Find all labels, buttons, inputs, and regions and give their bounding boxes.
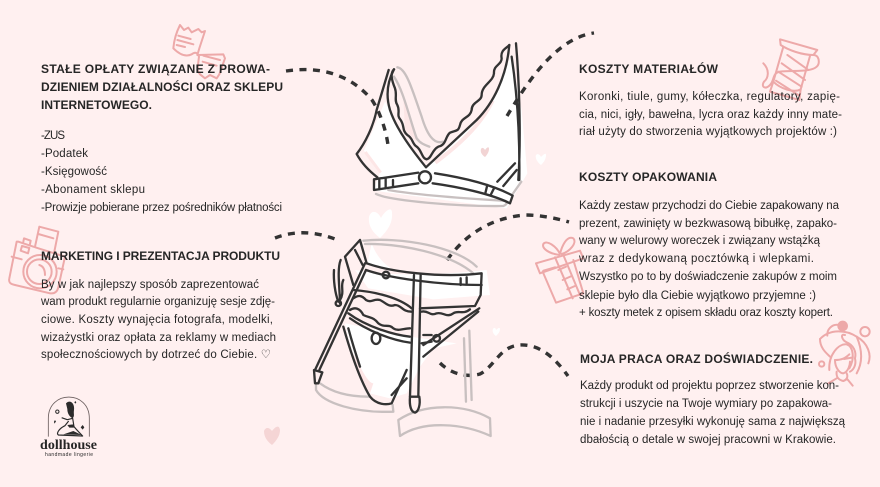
paragraph: material costs: Koronki, tiule, gumy, kółeczka, regulatory, zapię- [579, 91, 840, 103]
paragraph: marketing: społecznościowych by dotrzeć do Ciebie. ♡ [41, 349, 271, 361]
paragraph: marketing: ciowe. Koszty wynajęcia fotografa, modelki, [41, 314, 273, 326]
logo arch and figure [48, 397, 89, 437]
logo: dollhouse [40, 397, 97, 458]
paragraph: own work [580, 380, 846, 446]
list: fixed cost items: -ZUS [41, 130, 65, 142]
list: fixed cost items: -Prowizje pobierane przez pośredników płatności [41, 202, 282, 214]
heading: material costs: KOSZTY MATERIAŁÓW [579, 61, 719, 76]
icon: receipt [173, 25, 225, 78]
paragraph: packaging costs: Każdy zestaw przychodzi do Ciebie zapakowany na [579, 200, 840, 212]
icon: camera [9, 227, 65, 293]
list: fixed cost items: -Podatek [41, 148, 88, 160]
list: fixed cost items [41, 130, 282, 214]
heading: fixed costs: STAŁE OPŁATY ZWIĄZANE Z PROWA- [41, 62, 270, 76]
heading: fixed costs: INTERNETOWEGO. [41, 98, 152, 112]
icon: heart small pink [481, 147, 489, 157]
paragraph: packaging costs [578, 200, 840, 319]
paragraph: packaging costs: wany w welurowy woreczek i związany wstążką [578, 235, 821, 247]
paragraph: packaging costs: sklepie było dla Ciebie wyjątkowo przyjemne :) [579, 290, 816, 302]
heading: fixed costs: DZIENIEM DZIAŁALNOŚCI ORAZ SKLEPU [41, 79, 283, 94]
icon: heart small white [536, 154, 546, 165]
text block: fixed costs [41, 62, 283, 214]
dashed arrow: packaging to briefs [447, 215, 569, 260]
paragraph: marketing [40, 279, 276, 361]
paragraph: packaging costs: prezent, zawinięty w bezkwasową bibułkę, zapako- [579, 218, 837, 230]
paragraph: material costs [579, 91, 842, 138]
text block: packaging costs [578, 170, 840, 319]
logo wordmark: dollhouse [40, 438, 97, 453]
paragraph: material costs: cia, nici, igły, bawełna, lycra oraz każdy inny mate- [579, 109, 842, 121]
paragraph: own work: strukcji i uszycie na Twoje wymiary po zapakowa- [580, 398, 832, 410]
icon: gift [536, 238, 583, 303]
dashed arrow: own work to briefs [440, 345, 568, 376]
paragraph: packaging costs: wraz z dedykowaną pocztówką i wlepkami. [578, 253, 814, 265]
dashed arrow: materials to bra [507, 33, 594, 116]
list: fixed cost items: -Księgowość [41, 166, 107, 178]
dashed arrow: marketing to briefs [275, 233, 340, 241]
logo tagline: handmade lingerie [45, 452, 93, 458]
text block: marketing [40, 249, 280, 361]
paragraph: material costs: riał użyty do stworzenia wyjątkowych projektów :) [579, 126, 837, 138]
icon: woman with hair bun [819, 322, 870, 386]
paragraph: packaging costs: + koszty metek z opisem składu oraz koszty kopert. [579, 307, 833, 319]
illustration: bra [357, 43, 527, 208]
paragraph: marketing: By w jak najlepszy sposób zaprezentować [41, 279, 259, 291]
paragraph: packaging costs: Wszystko po to by doświadczenie zakupów z moim [579, 271, 837, 283]
icon: thread spool [763, 39, 819, 100]
heading: fixed costs [41, 62, 283, 112]
paragraph: own work: nie i nadanie przesyłki wykonuję sama z największą [580, 416, 846, 428]
text block: own work [580, 351, 846, 446]
heading: marketing: MARKETING I PREZENTACJA PRODUKTU [41, 249, 280, 263]
list: fixed cost items: -Abonament sklepu [41, 184, 145, 196]
heading: packaging costs: KOSZTY OPAKOWANIA [579, 170, 717, 184]
paragraph: own work: Każdy produkt od projektu poprzez stworzenie kon- [580, 380, 839, 392]
icon: heart large white [369, 209, 392, 238]
illustration: suspender briefs [314, 220, 491, 436]
dashed arrow: fixed costs to bra [286, 70, 388, 145]
paragraph: own work: dbałością o detale w swojej pracowni w Krakowie. [580, 434, 836, 446]
paragraph: marketing: wam produkt regularnie organizuję sesje zdję- [40, 296, 275, 308]
paragraph: marketing: wizażystki oraz opłata za reklamy w mediach [40, 332, 276, 344]
icon: heart tiny white [493, 328, 500, 336]
heading: own work: MOJA PRACA ORAZ DOŚWIADCZENIE. [580, 351, 813, 366]
icon: heart pale pink [264, 427, 280, 445]
text block: material costs [579, 61, 842, 138]
